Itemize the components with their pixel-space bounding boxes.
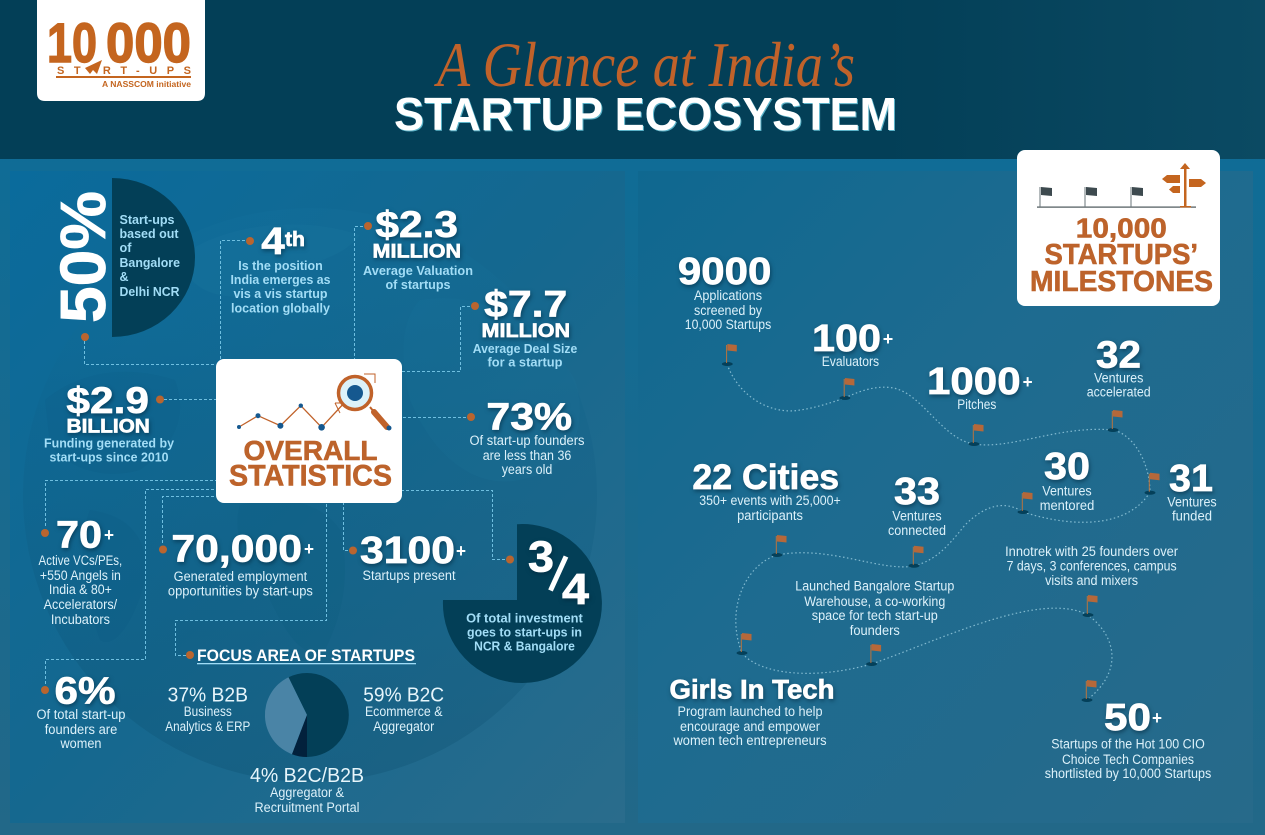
milestone: 50+ hot 100: Choice Tech Companies [1062,752,1194,767]
50% caption: & [120,269,128,284]
milestone: 9000 applications: Applications [694,288,762,303]
pie chart: focus area [265,673,349,757]
stat: three quarters: goes to start-ups in [467,625,582,640]
stat: $7.7 million: $7.7 [484,284,567,325]
stat: 6 percent: Of total start-up [36,707,126,722]
stat: 73 percent [470,396,585,477]
milestone: 100+ evaluators: 100 [812,318,881,360]
50% caption: of [120,240,132,255]
milestone: 33 connected: connected [888,523,946,538]
milestone: 50+ hot 100: Startups of the Hot 100 CIO [1051,737,1205,752]
pie label: 4% B2C/B2B: 4% B2C/B2B [250,765,364,787]
card heading [229,435,392,493]
stat: 70,000+: opportunities by start-ups [168,584,313,599]
milestone: Innotrek: Innotrek with 25 founders over [1005,544,1179,559]
milestone: 9000 applications: 9000 [678,251,771,293]
stat: $2.9 billion: $2.9 [66,380,149,421]
stat: 4th: vis a vis startup [234,286,328,301]
panel: milestones [638,171,1253,823]
milestone: Girls In Tech: women tech entrepreneurs [673,733,827,748]
pie label: 37% B2B: Business [184,704,232,719]
milestone: 32 accelerated: Ventures [1094,371,1144,386]
stat: 70+ investors: 70 [56,514,102,556]
stat: 70+ investors: Incubators [51,612,110,627]
stat: 70+ investors: Accelerators/ [44,597,117,612]
stat: 70,000+: Generated employment [174,569,307,584]
title main line: STARTUP ECOSYSTEM [394,88,897,140]
stat: $2.9 billion [44,380,175,465]
milestone route [727,364,1150,700]
milestone: 22 cities: 350+ events with 25,000+ [699,493,841,508]
stat: $2.9 billion: BILLION [67,417,150,438]
milestone: 22 cities [692,458,841,523]
milestone: 50+ hot 100 [1045,697,1212,781]
stat: $2.3 million: of startups [386,277,450,292]
milestone: Innotrek [1005,544,1179,588]
stat: 4th: th [285,229,305,251]
milestone flags [722,344,1160,702]
connector lines [46,226,505,684]
stat: 70,000+: + [304,539,314,559]
milestone: 22 cities: participants [737,508,803,523]
milestone: 9000 applications [678,251,771,332]
heading: focus area: FOCUS AREA OF STARTUPS [197,646,415,665]
50% caption: Bangalore [120,255,180,270]
milestone: 50+ hot 100: 50 [1104,697,1151,739]
50% caption: based out [120,226,179,241]
milestone: 9000 applications: screened by [694,303,762,318]
milestone: 33 connected: Ventures [892,509,942,524]
milestone: 31 funded [1167,458,1217,524]
pie label: 4% B2C/B2B: Recruitment Portal [254,800,360,815]
logo wordmark: ST RT-UPS [57,65,191,77]
pie label: 59% B2C: Ecommerce & [365,704,442,719]
milestone: 32 accelerated: 32 [1096,334,1141,376]
stat: 4th [230,221,331,316]
icon: line chart [237,401,346,431]
icon: signpost [1162,163,1206,208]
stat: 70+ investors: +550 Angels in [40,568,121,583]
stat: 6 percent [36,670,126,751]
stat: 73 percent: Of start-up founders [470,433,585,448]
stat: 50 percent [47,178,195,337]
milestone: Innotrek: visits and mixers [1045,573,1138,588]
milestone: Bangalore Startup Warehouse: Warehouse, a co-working [804,594,945,609]
milestone: Bangalore Startup Warehouse: Launched Bangalore Startup [795,579,954,594]
card heading: OVERALL [244,435,378,466]
connector dots [41,222,514,694]
stat: 70+ investors: + [104,525,114,545]
header band [0,0,1265,159]
stat: 6 percent: women [60,736,102,751]
pie label: 4% B2C/B2B [250,765,364,815]
milestone: 1000+ pitches: + [1023,372,1033,392]
stat: 73 percent: are less than 36 [483,448,571,463]
title [394,29,897,140]
milestone: 33 connected [888,471,946,538]
milestone: 31 funded: 31 [1169,458,1213,500]
milestone: 32 accelerated: accelerated [1087,385,1151,400]
milestone: Girls In Tech: encourage and empower [680,719,820,734]
pie label: 59% B2C: 59% B2C [363,685,444,707]
icon: magnifying glass [338,374,392,430]
milestone: 30 mentored: 30 [1044,446,1090,488]
stat: $7.7 million: MILLION [482,321,570,342]
milestone: 31 funded: Ventures [1167,495,1217,510]
fraction: 3 [528,533,554,582]
stat: $2.3 million: MILLION [373,242,461,263]
milestone: 30 mentored: Ventures [1042,484,1092,499]
pie label: 37% B2B [165,685,250,734]
card: overall statistics [216,359,402,503]
world map backdrop [23,208,597,782]
stat: 4th: Is the position [238,258,323,273]
panel: overall statistics [10,171,625,823]
logo card [37,0,205,101]
pie label: 59% B2C: Aggregator [373,719,435,734]
logo number [47,11,191,74]
milestone: 30 mentored: mentored [1040,498,1094,513]
three-quarter pie [443,524,602,683]
stat: three quarters: NCR & Bangalore [474,639,575,654]
stat: 4th: location globally [231,300,331,316]
stat: $7.7 million: Average Deal Size [473,341,577,356]
logo number: 10 [47,11,97,74]
pie label: 59% B2C [363,685,444,734]
logo number: 000 [106,11,191,74]
half circle [112,178,195,337]
caption: Of total investment [466,611,584,626]
milestone: Innotrek: 7 days, 3 conferences, campus [1007,559,1177,574]
card heading: 10,000 [1076,213,1167,244]
milestone: Girls In Tech: Program launched to help [678,704,822,719]
fraction: 4 [562,565,590,614]
logo rule [56,76,191,78]
logo tagline: A NASSCOM initiative [102,80,192,89]
stat: 6 percent: 6% [54,670,116,712]
stat: 70+ investors: Active VCs/PEs, [39,553,122,568]
card heading [1030,213,1213,298]
stat: $7.7 million: for a startup [488,355,563,370]
milestone: 31 funded: funded [1172,509,1212,524]
milestone: 100+ evaluators: + [883,329,893,349]
milestone: Girls In Tech [670,674,834,748]
milestone: 50+ hot 100: + [1152,708,1162,728]
stat: 70,000+ [168,529,314,599]
milestone: Bangalore Startup Warehouse [795,579,954,638]
card: milestones [1017,150,1220,306]
stat: 3100+ [360,530,466,583]
milestone: 100+ evaluators: Evaluators [822,354,879,369]
stat: $2.9 billion: start-ups since 2010 [50,450,168,465]
milestone: Bangalore Startup Warehouse: space for tech start-up [812,608,938,623]
milestone: 32 accelerated [1087,334,1151,400]
milestone: Bangalore Startup Warehouse: founders [850,623,900,638]
stat: 70+ investors: India & 80+ [49,582,112,597]
stat: $2.3 million: Average Valuation [363,263,473,278]
stat: 73 percent: 73% [486,396,572,438]
stat: 6 percent: founders are [45,722,117,737]
milestone: 33 connected: 33 [894,471,940,513]
milestone: 1000+ pitches: 1000 [927,361,1021,403]
icon: flags on a line [1037,187,1196,208]
fraction [528,533,590,614]
card heading: MILESTONES [1030,266,1213,298]
stat: 70,000+: 70,000 [171,529,302,571]
50% figure: 50% [47,191,119,323]
stat: $2.3 million [363,204,473,292]
stat: 3100+: 3100 [360,530,455,572]
stat: 4th: India emerges as [230,272,330,287]
milestone: 22 cities: 22 Cities [692,458,839,497]
50% caption [120,212,180,299]
milestone: 1000+ pitches [927,361,1033,412]
pie label: 37% B2B: Analytics & ERP [165,719,250,734]
milestone: 50+ hot 100: shortlisted by 10,000 Startups [1045,766,1212,781]
icon: paper plane [85,60,102,74]
pie label: 37% B2B: 37% B2B [168,685,248,707]
stat: $2.9 billion: Funding generated by [44,436,175,451]
stat: 73 percent: years old [502,462,552,477]
milestone: 9000 applications: 10,000 Startups [685,317,771,332]
50% caption: Start-ups [120,212,174,227]
stat: three quarters [443,524,602,683]
stat: $7.7 million [473,284,577,370]
milestone: Girls In Tech: Girls In Tech [670,674,834,704]
card heading: STATISTICS [229,460,392,493]
50% caption: Delhi NCR [120,284,180,299]
stat: 3100+: + [456,541,466,561]
stat: 3100+: Startups present [362,568,456,583]
milestone: 1000+ pitches: Pitches [957,397,997,412]
milestone: 100+ evaluators [812,318,893,369]
card heading: STARTUPS’ [1045,239,1198,271]
stat: 70+ investors [39,514,122,627]
title script line: A Glance at India’s [434,29,855,100]
stat: 4th: 4 [261,221,285,263]
stat: $2.3 million: $2.3 [375,204,458,245]
milestone: 30 mentored [1040,446,1094,513]
pie label: 4% B2C/B2B: Aggregator & [270,785,344,800]
